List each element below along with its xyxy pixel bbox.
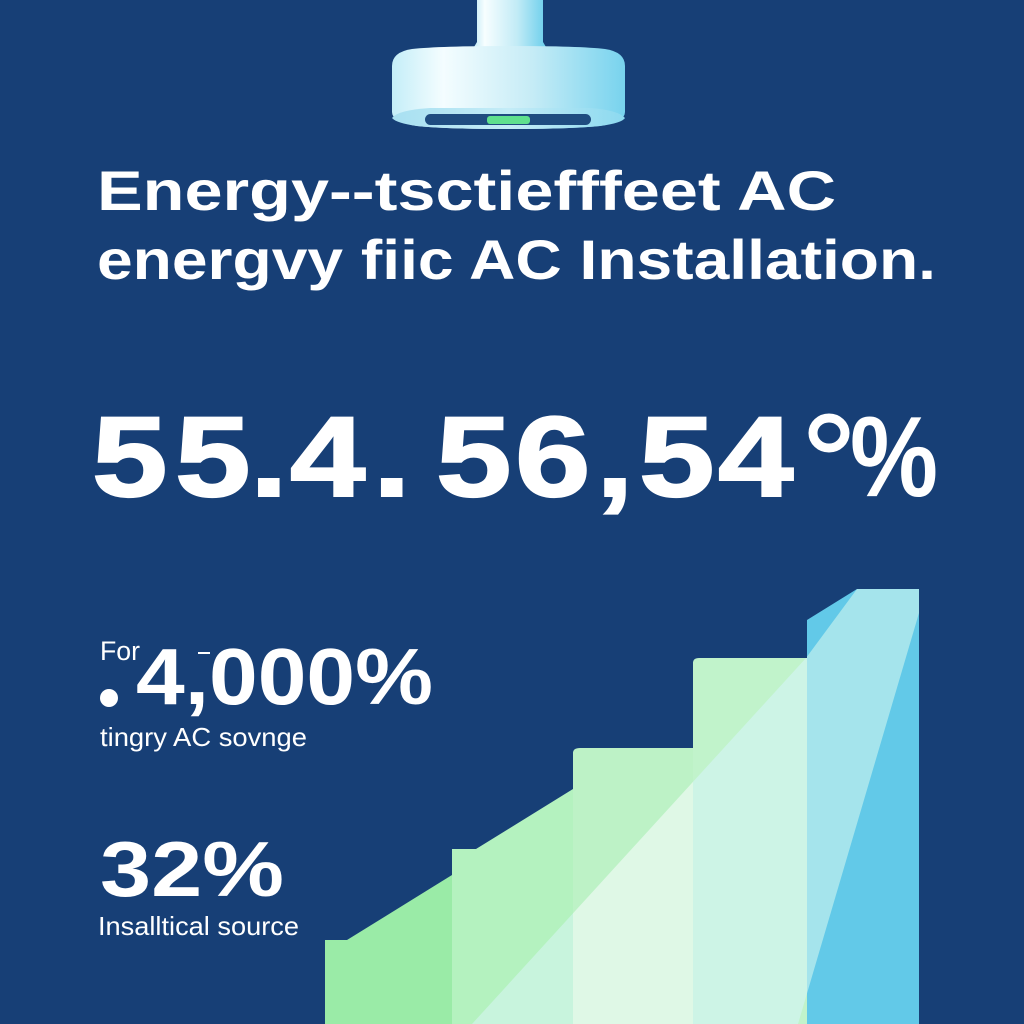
- headline statistic: 55.4.56,54: [92, 393, 793, 521]
- bar 4: [693, 658, 807, 1024]
- unit body: [392, 46, 625, 129]
- title: [97, 159, 936, 291]
- status light: [487, 116, 530, 124]
- air vent slot: [425, 114, 591, 125]
- stat caption: Insalltical source: [98, 911, 299, 941]
- percent sign: %: [850, 394, 938, 521]
- stat block: savings: [100, 632, 433, 752]
- unit stem: [474, 0, 546, 47]
- light beam overlay: [452, 580, 919, 1024]
- small label: For: [100, 636, 140, 666]
- stat dot: [100, 689, 118, 707]
- stat value: 32%: [100, 825, 284, 913]
- icon: ceiling air conditioner: [392, 0, 625, 129]
- title: energvy fiic AC Installation.: [97, 228, 936, 291]
- title: Energy--tsctiefffeet AC: [97, 159, 836, 222]
- small dash: [198, 652, 210, 654]
- stat caption: tingry AC sovnge: [100, 722, 307, 752]
- stat block: source: [98, 825, 299, 941]
- stat value: 4,000%: [136, 632, 433, 721]
- extra percent ring: [813, 418, 845, 448]
- bar 2: [452, 789, 573, 1024]
- bar 1: [325, 875, 452, 1024]
- bar 3: [573, 748, 693, 914]
- bar 5: [807, 580, 919, 1024]
- unit lower lip: [392, 108, 625, 129]
- rising bar chart: [325, 580, 919, 1024]
